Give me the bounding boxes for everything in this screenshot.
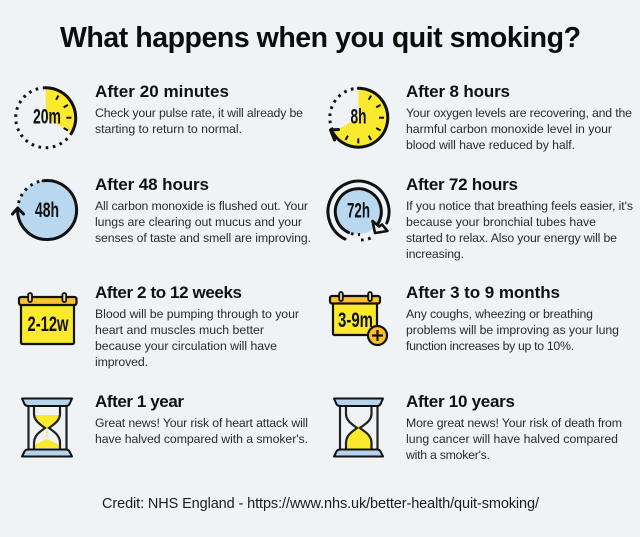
credit line: Credit: NHS England - https://www.nhs.uk/better-health/quit-smoking/ [102, 496, 540, 512]
icon: 48 hour circular arrow [12, 181, 77, 240]
body text: heart and muscles much better [95, 323, 264, 337]
icon: hourglass with full lower bulb [334, 398, 383, 456]
icon: 8 hour clock [330, 88, 388, 147]
icon: 72 hour double ring arrow [328, 181, 389, 240]
body text: Any coughs, wheezing or breathing [406, 307, 593, 321]
body text: Your oxygen levels are recovering, and the [406, 106, 632, 120]
body text: Check your pulse rate, it will already be [95, 106, 303, 120]
icon: calendar 2-12w [19, 293, 76, 344]
icon: 48 hour circular arrow: 48h [35, 199, 59, 222]
icon: calendar 3-9m with plus: 3-9m [338, 309, 373, 332]
body text [95, 307, 299, 369]
body text: improved. [95, 355, 148, 369]
body text: lung cancer will have halved compared [406, 432, 618, 446]
heading: After 2 to 12 weeks [95, 283, 242, 302]
body text: because your circulation will have [95, 339, 277, 353]
icon: 72 hour double ring arrow: 72h [347, 200, 370, 222]
body text: lungs are clearing out mucus and your [95, 215, 302, 229]
icon: 8 hour clock: 8h [350, 106, 366, 128]
body text: function increases by up to 10%. [406, 339, 574, 353]
heading: After 48 hours [95, 175, 209, 194]
body text [95, 106, 303, 136]
heading: After 3 to 9 months [406, 283, 560, 302]
panel: after 2 to 12 weeks [19, 283, 299, 369]
body text: have halved compared with a smoker's. [95, 432, 308, 446]
body text: problems will be improving as your lung [406, 323, 619, 337]
icon: calendar 2-12w: 2-12w [28, 313, 69, 336]
icon: 20 minute clock [16, 88, 76, 148]
heading: After 8 hours [406, 82, 510, 101]
body text: starting to return to normal. [95, 122, 242, 136]
body text [95, 416, 308, 446]
body text: increasing. [406, 247, 464, 261]
body text [406, 307, 619, 353]
body text: All carbon monoxide is flushed out. Your [95, 199, 308, 213]
body text: If you notice that breathing feels easier, it's [406, 199, 633, 213]
title: What happens when you quit smoking? [60, 22, 581, 54]
body text: blood will have reduced by half. [406, 138, 575, 152]
panel: after 8 hours [330, 82, 632, 152]
body text: with a smoker's. [405, 448, 490, 462]
heading: After 10 years [406, 392, 515, 411]
panel: after 10 years [334, 392, 622, 462]
body text [405, 416, 622, 462]
body text: senses of taste and smell are improving. [95, 231, 311, 245]
body text: More great news! Your risk of death from [406, 416, 622, 430]
body text [406, 199, 633, 261]
panel: after 1 year [22, 392, 308, 456]
heading: After 72 hours [406, 175, 518, 194]
panel: after 20 minutes [16, 82, 303, 148]
panel: after 48 hours [12, 175, 311, 245]
body text: Great news! Your risk of heart attack will [95, 416, 308, 430]
panel: after 3 to 9 months [330, 283, 619, 353]
icon: calendar 3-9m with plus [330, 292, 387, 345]
body text [95, 199, 311, 245]
body text: started to relax. Also your energy will be [406, 231, 617, 245]
body text: Blood will be pumping through to your [95, 307, 299, 321]
panel: after 72 hours [328, 175, 633, 261]
icon: 20 minute clock: 20m [33, 106, 61, 128]
body text: harmful carbon monoxide level in your [406, 122, 612, 136]
heading: After 1 year [95, 392, 184, 411]
body text [406, 106, 632, 152]
body text: because your bronchial tubes have [406, 215, 596, 229]
icon: hourglass with sand falling [22, 398, 72, 456]
heading: After 20 minutes [95, 82, 229, 101]
